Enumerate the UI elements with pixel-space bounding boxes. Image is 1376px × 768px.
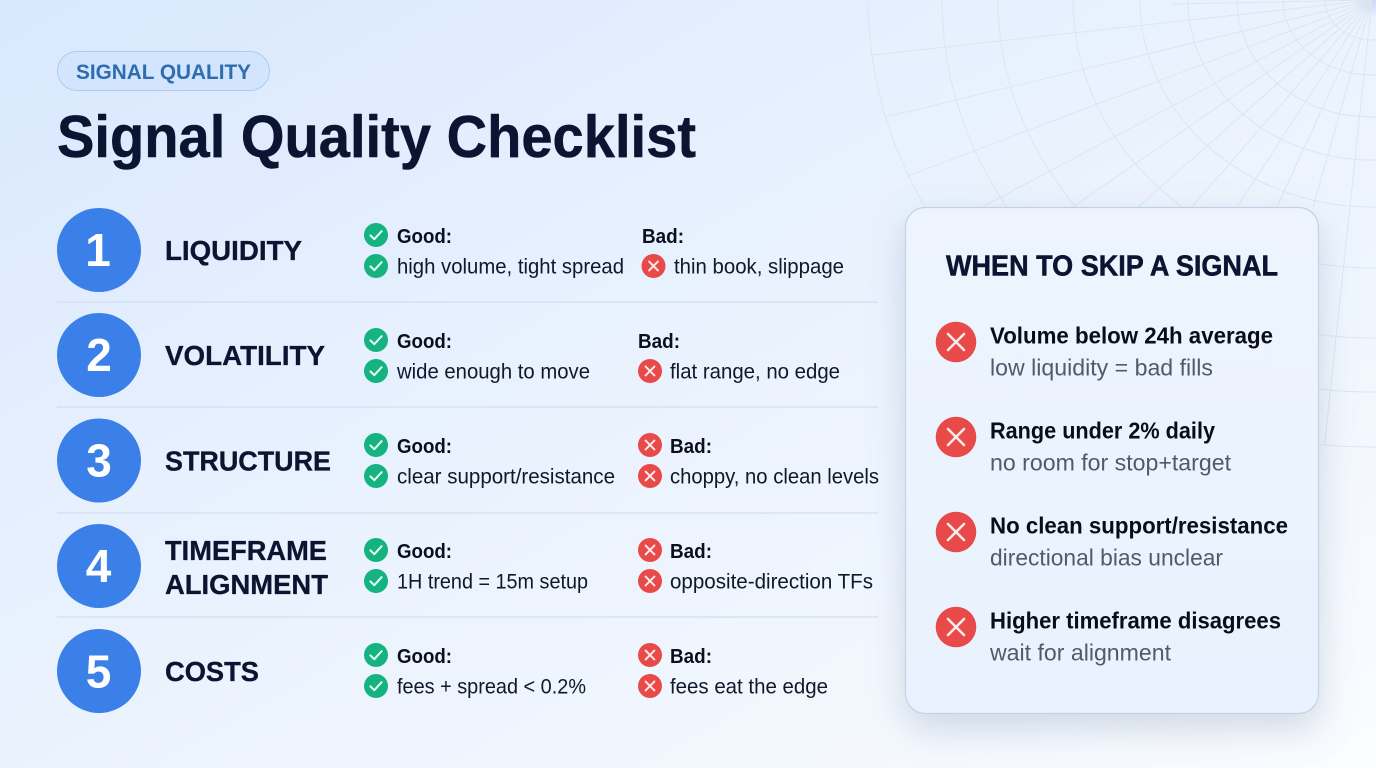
skip item 2: no room for stop+target [990, 450, 1232, 476]
number badge 4: 4 [86, 540, 112, 592]
bad column: Bad: [670, 436, 712, 458]
number badge 2: 2 [86, 329, 112, 381]
bad column: Bad: [638, 331, 680, 353]
good column: 1H trend = 15m setup [397, 570, 588, 594]
good column: wide enough to move [396, 360, 590, 384]
bad column [642, 226, 844, 278]
background radial grid [868, 0, 1376, 460]
label: volatility: VOLATILITY [165, 340, 325, 371]
good column [364, 538, 588, 594]
bad column: Bad: [670, 646, 712, 668]
skip item 1: Volume below 24h average [990, 322, 1273, 348]
row 4: timeframe alignment [57, 524, 873, 608]
label: timeframe alignment: ALIGNMENT [165, 569, 328, 600]
good column: Good: [397, 331, 452, 353]
number badge 1 [57, 208, 141, 292]
label: timeframe alignment: TIMEFRAME [165, 535, 327, 566]
good column: Good: [397, 541, 452, 563]
label: liquidity: LIQUIDITY [165, 235, 302, 266]
number badge 5: 5 [86, 646, 111, 698]
bad column: opposite-direction TFs [670, 570, 873, 594]
title: Signal Quality Checklist [57, 104, 696, 170]
bad column: Bad: [670, 541, 712, 563]
row 3: structure [57, 418, 879, 502]
bad column: Bad: [642, 226, 684, 248]
good column: clear support/resistance [397, 466, 615, 488]
skip item 4: wait for alignment [989, 640, 1172, 666]
number badge 5 [57, 629, 141, 713]
pill badge [58, 52, 270, 90]
bad column: flat range, no edge [670, 360, 840, 384]
panel: checklist [57, 208, 879, 713]
label: costs: COSTS [165, 656, 259, 687]
good column: Good: [397, 646, 452, 668]
panel: when to skip a signal [906, 208, 1318, 714]
label: timeframe alignment [165, 535, 328, 600]
number badge 4 [57, 524, 141, 608]
pill badge: SIGNAL QUALITY [76, 61, 251, 84]
bad column [638, 538, 873, 594]
bad column [638, 643, 828, 698]
skip item 3 [936, 512, 1288, 570]
number badge 1: 1 [85, 224, 111, 276]
skip item 2: Range under 2% daily [990, 418, 1215, 444]
bad column: fees eat the edge [670, 676, 828, 698]
panel heading: WHEN TO SKIP A SIGNAL [946, 250, 1278, 282]
bad column [638, 433, 879, 488]
row 2: volatility [57, 313, 840, 397]
good column [364, 223, 624, 278]
skip item 1 [936, 322, 1273, 380]
skip item 2 [936, 417, 1232, 476]
good column: Good: [397, 226, 452, 248]
good column [364, 433, 615, 488]
bad column: choppy, no clean levels [670, 466, 879, 488]
good column [364, 328, 590, 384]
skip item 3: directional bias unclear [990, 544, 1223, 570]
skip item 4 [936, 607, 1281, 666]
skip item 3: No clean support/resistance [990, 512, 1288, 538]
label: structure: STRUCTURE [165, 446, 331, 476]
good column: Good: [397, 436, 452, 458]
good column: fees + spread < 0.2% [397, 676, 586, 698]
bad column [638, 331, 840, 384]
number badge 2 [57, 313, 141, 397]
skip item 1: low liquidity = bad fills [990, 354, 1213, 380]
number badge 3 [57, 418, 141, 502]
bad column: thin book, slippage [674, 256, 844, 278]
skip item 4: Higher timeframe disagrees [990, 608, 1281, 634]
row 5: costs [57, 629, 828, 713]
good column: high volume, tight spread [397, 256, 624, 278]
good column [364, 643, 586, 698]
row 1: liquidity [57, 208, 844, 292]
number badge 3: 3 [86, 434, 112, 486]
